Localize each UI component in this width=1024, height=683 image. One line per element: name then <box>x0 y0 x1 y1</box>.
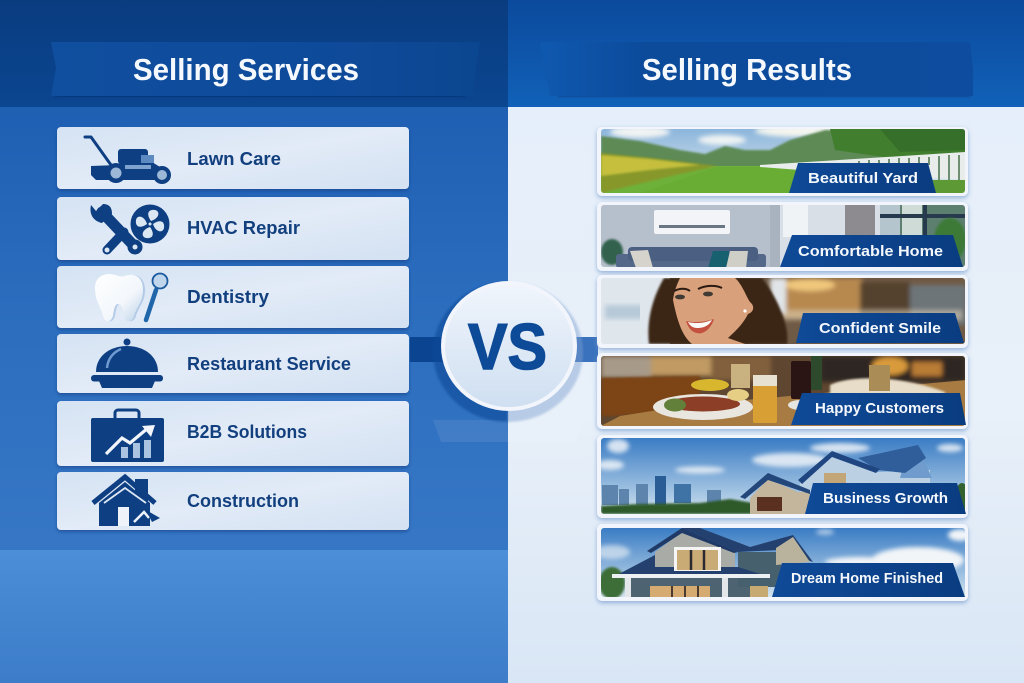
card: business growth <box>596 435 969 518</box>
panel: service cards <box>57 127 409 530</box>
label ribbon: Happy Customers: Happy Customers <box>815 400 944 417</box>
label ribbon: Beautiful Yard <box>789 163 936 193</box>
label ribbon: Confident Smile <box>796 313 964 343</box>
card: dream home finished <box>594 524 972 601</box>
label ribbon: Comfortable Home: Comfortable Home <box>798 243 943 260</box>
heading: Selling Results: Selling Results <box>642 52 852 87</box>
card: confident smile <box>597 275 968 348</box>
label ribbon: Dream Home Finished <box>772 563 965 597</box>
photo: living room with air conditioner <box>601 205 966 268</box>
card: restaurant service <box>57 334 409 393</box>
label: B2B Solutions: B2B Solutions <box>187 422 307 442</box>
card: b2b solutions <box>57 401 409 466</box>
label ribbon: Business Growth: Business Growth <box>823 490 948 507</box>
vs badge <box>433 281 583 422</box>
label ribbon: Dream Home Finished: Dream Home Finished <box>791 570 943 587</box>
photo: smiling woman <box>601 278 966 344</box>
label: Dentistry: Dentistry <box>187 287 269 307</box>
icon: tooth and mirror <box>95 274 168 321</box>
panel: right background <box>508 0 1024 683</box>
panel: left background <box>0 0 508 683</box>
icon: wrench and fan <box>90 204 170 254</box>
photo: yard <box>601 125 966 193</box>
photo: finished house <box>594 528 972 599</box>
label: VS: VS <box>468 310 547 383</box>
label: Construction: Construction <box>187 491 299 511</box>
card: dentistry <box>57 266 409 328</box>
label: HVAC Repair: HVAC Repair <box>187 218 300 238</box>
photo: restaurant table <box>601 356 966 426</box>
card: lawn care <box>57 127 409 189</box>
label: Lawn Care: Lawn Care <box>187 149 281 169</box>
label ribbon: Happy Customers <box>791 393 966 425</box>
label ribbon: Comfortable Home <box>780 235 963 267</box>
icon: cloche <box>91 338 163 388</box>
label ribbon: Beautiful Yard: Beautiful Yard <box>808 170 918 187</box>
panel: result cards <box>594 125 972 601</box>
icon: lawn mower <box>85 137 171 184</box>
photo: skyline and house <box>596 438 969 514</box>
label ribbon: Confident Smile: Confident Smile <box>819 320 941 337</box>
faint plinth under vs badge <box>433 420 582 442</box>
icon: house with tools <box>93 477 160 526</box>
connector bar: left <box>410 337 450 362</box>
card: happy customers <box>597 353 968 429</box>
card: hvac repair <box>57 197 409 260</box>
label: Restaurant Service: Restaurant Service <box>187 354 351 374</box>
heading ribbon: selling results <box>540 42 973 97</box>
heading ribbon: selling services <box>51 42 480 97</box>
card: comfortable home <box>597 202 968 271</box>
card: construction <box>57 472 409 530</box>
card: beautiful yard <box>597 125 968 196</box>
icon: briefcase with growth chart <box>91 410 164 462</box>
label ribbon: Business Growth <box>805 483 966 514</box>
connector bar: right <box>570 337 598 362</box>
heading: Selling Services: Selling Services <box>133 52 359 87</box>
